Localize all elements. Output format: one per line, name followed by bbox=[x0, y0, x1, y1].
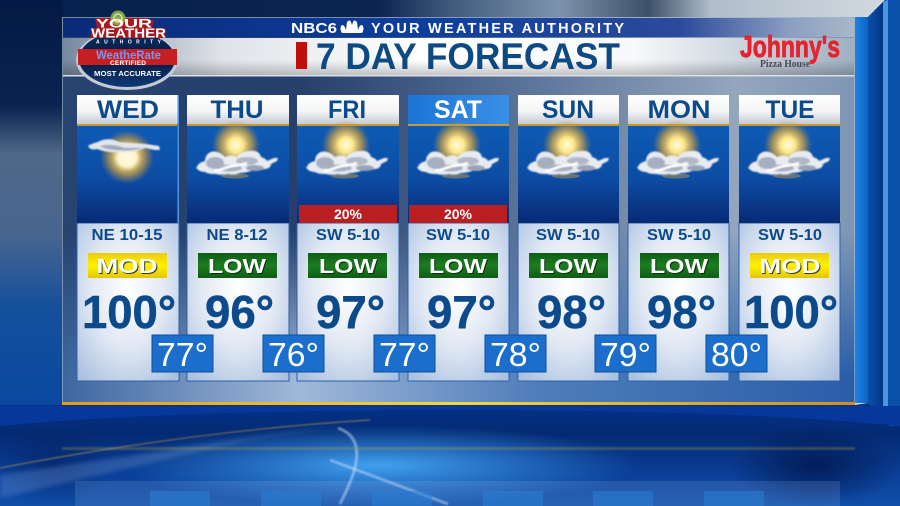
high temperature: 96° bbox=[205, 286, 274, 338]
risk badge: LOW bbox=[320, 257, 378, 279]
low: 80: 80° bbox=[711, 336, 762, 373]
high temperature: 100° bbox=[82, 286, 176, 338]
icon: partly cloudy bbox=[748, 120, 830, 178]
floor reflection bbox=[0, 403, 900, 506]
day label: WED bbox=[97, 96, 159, 124]
wind: SW 5-10 bbox=[647, 227, 711, 244]
icon: partly cloudy bbox=[637, 120, 719, 178]
risk badge: MOD bbox=[760, 257, 822, 279]
risk badge: LOW bbox=[430, 257, 488, 279]
logo: Your Weather Authority seal: YOUR bbox=[96, 16, 153, 30]
wind: SW 5-10 bbox=[536, 227, 600, 244]
risk badge bbox=[640, 253, 719, 279]
low temperatures bbox=[152, 335, 767, 373]
risk badge: LOW bbox=[209, 257, 267, 279]
high temperature: 97° bbox=[316, 286, 385, 338]
rain chance bbox=[409, 205, 507, 223]
wind: NE 8-12 bbox=[206, 227, 268, 244]
wind: NE 10-15 bbox=[92, 227, 163, 244]
column: TUE bbox=[739, 95, 840, 381]
day label: TUE bbox=[766, 96, 814, 124]
risk badge: MOD bbox=[98, 257, 158, 279]
risk badge bbox=[198, 253, 277, 279]
logo: Johnny's Pizza House bbox=[740, 29, 840, 70]
column: WED bbox=[77, 95, 179, 381]
pillar: right blue column bbox=[855, 0, 900, 426]
rain chance: 20% bbox=[444, 206, 473, 222]
panel: forecast board backing bbox=[62, 17, 855, 405]
wind: SW 5-10 bbox=[316, 227, 380, 244]
risk badge: MOD bbox=[96, 256, 158, 278]
risk badge bbox=[750, 253, 829, 279]
low: 77: 77° bbox=[157, 336, 208, 373]
logo: Johnny's Pizza House: Johnny's bbox=[740, 29, 840, 64]
icon: red title marker bbox=[296, 42, 307, 69]
logo: Your Weather Authority seal: MOST ACCURATE bbox=[94, 69, 161, 78]
logo: Johnny's Pizza House: Pizza House bbox=[760, 59, 811, 70]
icon: partly cloudy bbox=[306, 120, 388, 178]
day label: SUN bbox=[542, 96, 594, 124]
logo: Your Weather Authority seal: WEATHER bbox=[91, 26, 166, 40]
rain chance bbox=[299, 205, 397, 223]
column: FRI bbox=[297, 95, 399, 381]
risk badge: LOW bbox=[539, 256, 597, 278]
icon: partly cloudy bbox=[417, 120, 499, 178]
risk badge bbox=[308, 253, 387, 279]
high temperature: 98° bbox=[647, 286, 716, 338]
icon: partly cloudy bbox=[527, 120, 609, 178]
risk badge: LOW bbox=[208, 256, 266, 278]
column: SAT bbox=[408, 95, 509, 381]
tagline text: YOUR WEATHER AUTHORITY bbox=[371, 21, 624, 37]
risk badge: LOW bbox=[651, 257, 709, 279]
risk badge: LOW bbox=[540, 257, 598, 279]
day label: FRI bbox=[328, 96, 366, 124]
logo: Your Weather Authority seal bbox=[76, 10, 178, 90]
logo: Your Weather Authority seal: AUTHORITY bbox=[96, 40, 162, 46]
low: 76: 76° bbox=[268, 336, 319, 373]
column: MON bbox=[628, 95, 729, 381]
day label: THU bbox=[210, 96, 264, 124]
risk badge: LOW bbox=[650, 256, 708, 278]
day label: MON bbox=[648, 96, 710, 124]
wind: SW 5-10 bbox=[758, 227, 822, 244]
logo: Your Weather Authority seal: CERTIFIED bbox=[110, 60, 146, 67]
low: 78: 78° bbox=[490, 336, 541, 373]
wind: SW 5-10 bbox=[426, 227, 490, 244]
risk badge: MOD bbox=[760, 256, 820, 278]
low: 77: 77° bbox=[379, 336, 430, 373]
risk badge bbox=[419, 253, 498, 279]
risk badge: LOW bbox=[319, 256, 377, 278]
gold base line bbox=[62, 402, 855, 406]
low: 79: 79° bbox=[600, 336, 651, 373]
rain chance: 20% bbox=[334, 206, 363, 222]
icon: mostly sunny bbox=[88, 130, 160, 184]
logo: Your Weather Authority seal: WeatheRate bbox=[96, 48, 161, 62]
header strip: station tagline bbox=[63, 18, 854, 37]
high temperature: 98° bbox=[537, 286, 606, 338]
high temperature: 97° bbox=[427, 286, 496, 338]
risk badge bbox=[88, 253, 167, 279]
risk badge: LOW bbox=[429, 256, 487, 278]
icon: partly cloudy bbox=[196, 120, 278, 178]
column: THU bbox=[187, 95, 289, 381]
high temperature: 100° bbox=[744, 286, 838, 338]
day label: SAT bbox=[434, 96, 482, 124]
risk badge bbox=[529, 253, 608, 279]
column: SUN bbox=[518, 95, 619, 381]
title bar bbox=[63, 36, 854, 77]
title: 7 DAY FORECAST bbox=[316, 36, 620, 77]
tagline text: NBC6 bbox=[291, 21, 337, 37]
